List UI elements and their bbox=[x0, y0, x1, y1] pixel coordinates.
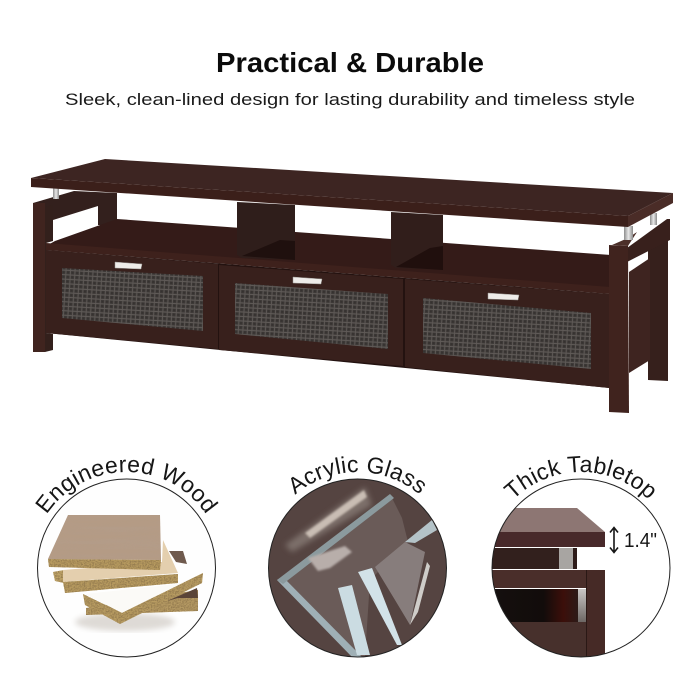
infographic canvas bbox=[31, 52, 673, 658]
label: thick tabletop: Thick Tabletop bbox=[503, 456, 654, 498]
acrylic sheets photo bbox=[268, 479, 447, 657]
thickness value: 1.4" bbox=[624, 530, 657, 552]
handle 3 bbox=[488, 293, 519, 300]
circle outline bbox=[38, 479, 216, 657]
drawer backing bbox=[46, 250, 610, 388]
thickness arrow bbox=[610, 528, 618, 552]
shelf surface bbox=[46, 219, 611, 288]
glass panel 1 bbox=[62, 268, 203, 331]
label: engineered wood: Engineered Wood bbox=[35, 458, 218, 514]
drawer 2 bbox=[219, 265, 403, 366]
wood boards photo bbox=[48, 515, 203, 633]
circle outline bbox=[492, 479, 670, 657]
tabletop bbox=[31, 159, 673, 227]
glass panel 3 bbox=[423, 298, 591, 369]
feature: acrylic glass bbox=[268, 456, 447, 658]
left side rail and rear post bbox=[33, 191, 117, 225]
rear right leg and side panel bbox=[629, 238, 668, 381]
shelf front edge bbox=[46, 243, 610, 294]
TV stand bbox=[31, 159, 673, 413]
right front leg bbox=[609, 232, 637, 413]
tabletop close-up bbox=[492, 508, 605, 656]
handle 1 bbox=[115, 262, 142, 269]
feature: engineered wood bbox=[35, 458, 218, 658]
middle dividers bbox=[237, 202, 443, 270]
drawer 1 bbox=[46, 250, 218, 349]
chrome posts bbox=[53, 187, 657, 240]
glass panel 2 bbox=[235, 283, 388, 349]
drawer 3 bbox=[405, 279, 609, 388]
handle 2 bbox=[293, 277, 322, 284]
right side rail bbox=[627, 219, 670, 262]
feature: thick tabletop bbox=[492, 456, 670, 658]
label: acrylic glass: Acrylic Glass bbox=[291, 456, 425, 495]
circle outline bbox=[268, 479, 446, 657]
title: Practical & Durable bbox=[216, 47, 484, 78]
left front leg bbox=[33, 203, 53, 352]
subtitle: Sleek, clean-lined design for lasting durability and timeless style bbox=[65, 90, 635, 109]
